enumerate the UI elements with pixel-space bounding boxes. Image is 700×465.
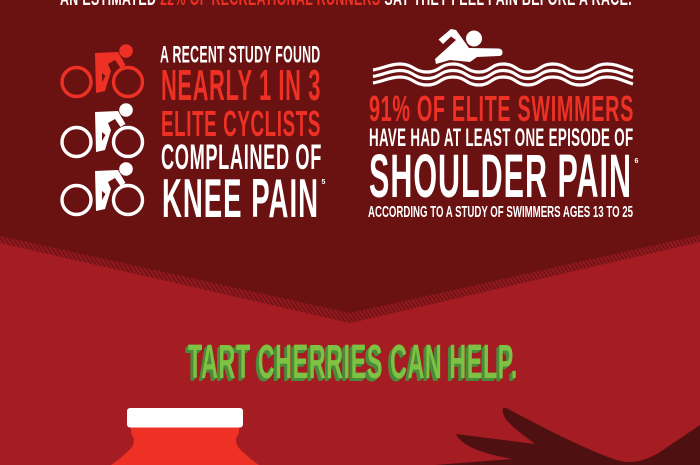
text block: cyclists statistic: NEARLY 1 IN 3 [161,62,321,110]
text block: swimmers statistic [368,88,638,221]
icon: red cyclist [62,44,142,96]
text block: cyclists statistic: A RECENT STUDY FOUND [160,42,320,68]
icon: white cyclist [62,162,142,214]
icon: supplement bottle [111,408,259,465]
text block: cyclists statistic: KNEE PAIN [162,167,319,229]
icon: swimmer [435,29,502,64]
icon: white cyclist [62,103,142,156]
text block: cyclists statistic: COMPLAINED OF [161,138,322,177]
icon: hand silhouette [435,408,700,465]
icon: water waves [373,64,633,85]
text block: swimmers statistic: 6 [634,158,638,165]
heading: tart cherries can help [185,336,518,392]
icon group: three cyclists [62,44,142,215]
text block: cyclists statistic: ELITE CYCLISTS [161,103,321,144]
text block: cyclists statistic [160,42,326,229]
text block: cyclists statistic: 5 [322,179,326,186]
lower red panel with chevron edge [0,235,700,465]
